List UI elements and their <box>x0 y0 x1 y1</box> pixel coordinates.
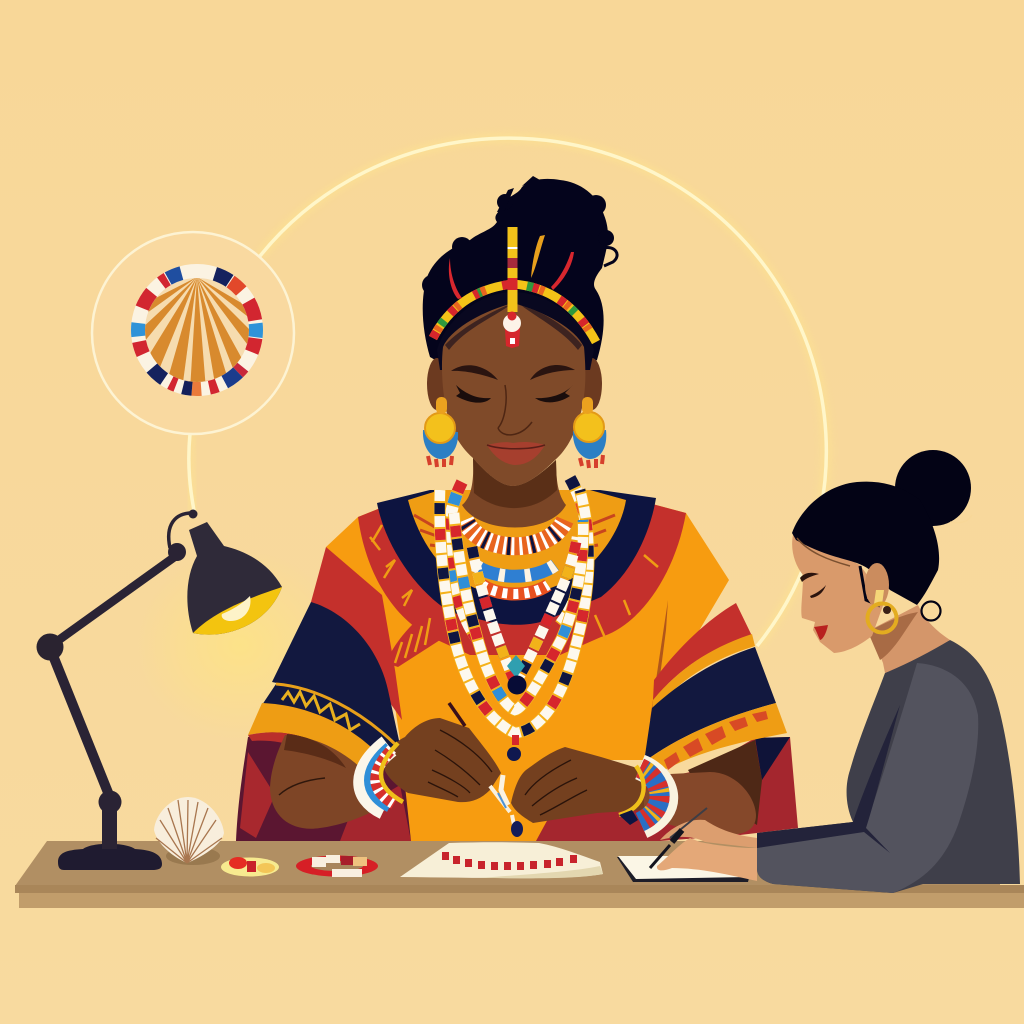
right hand <box>511 747 644 823</box>
lamp glow <box>135 550 345 740</box>
table front <box>19 893 1024 908</box>
neck shadow <box>473 458 557 508</box>
chest beaded collars <box>465 520 565 594</box>
necklace inner <box>472 537 577 683</box>
central pendant <box>508 676 526 694</box>
hair <box>792 482 939 605</box>
right sleeve scallops <box>664 711 768 770</box>
table <box>15 841 1024 908</box>
notebook <box>617 856 749 882</box>
left bracelets <box>365 743 403 808</box>
back robe left <box>236 728 420 841</box>
earring left <box>423 397 458 467</box>
lamp arms <box>54 658 109 795</box>
yoke gold stripes <box>408 490 626 595</box>
table top <box>15 841 1000 886</box>
yoke fringe <box>386 607 440 667</box>
left sleeve navy <box>272 602 400 745</box>
ear right <box>582 358 602 410</box>
sweater shadow <box>757 705 900 853</box>
hair curl <box>603 247 617 266</box>
right bracelets <box>619 766 665 826</box>
face <box>442 303 585 486</box>
left sleeve pattern band <box>262 684 396 760</box>
main figure: woman beading <box>236 176 798 841</box>
sweater <box>757 640 1020 893</box>
necklace side left <box>448 482 478 640</box>
lower pendant <box>507 735 521 761</box>
bun <box>895 450 971 526</box>
medallion shell <box>145 278 249 382</box>
lamp post <box>102 805 117 849</box>
second woman writing <box>650 450 1020 893</box>
lamp bulb <box>222 596 251 621</box>
necklace middle <box>454 513 583 710</box>
hair loop <box>922 602 940 620</box>
red bead line <box>442 852 577 870</box>
long necklaces <box>440 478 589 733</box>
neck front <box>462 458 566 528</box>
lips <box>814 625 828 640</box>
neck <box>870 605 950 673</box>
left sleeve gold edge <box>248 703 384 778</box>
lamp loop <box>169 513 192 548</box>
table bead piece yellow <box>221 857 279 876</box>
needle <box>449 703 465 726</box>
lamp shade <box>187 522 282 635</box>
halo ring <box>189 138 826 646</box>
hair band shadow <box>437 292 594 370</box>
lips <box>487 442 545 465</box>
yoke glyphs <box>370 525 658 640</box>
writing hand <box>657 838 757 881</box>
hair parting strands <box>445 303 582 350</box>
brow and eye <box>800 573 826 598</box>
hair <box>422 176 614 380</box>
right sleeve navy <box>644 647 776 762</box>
illustration: artisans at beadwork table <box>15 136 1024 908</box>
robe yellow body <box>326 497 729 841</box>
beads in hands <box>490 775 523 837</box>
left hand <box>383 718 501 802</box>
eyes <box>456 385 573 403</box>
earring right <box>573 397 606 468</box>
back robe right <box>534 737 798 841</box>
yoke navy crescent <box>377 490 656 625</box>
robe yoke red band <box>358 497 686 655</box>
teal diamond above pendant <box>507 655 525 678</box>
right sleeve patterned band <box>644 703 787 775</box>
ear left <box>427 358 447 410</box>
desk lamp <box>36 510 282 870</box>
left sleeve red <box>311 547 402 720</box>
face <box>792 535 885 653</box>
table bead ring red <box>296 855 378 877</box>
table edge <box>15 885 1024 893</box>
lamp opening <box>193 587 282 635</box>
right sleeve stripes <box>653 603 752 700</box>
pen <box>650 845 670 868</box>
forehead ornament <box>503 227 521 348</box>
headband <box>433 284 596 342</box>
nose <box>498 385 532 435</box>
hair feathers <box>449 258 462 299</box>
medallion: scallop shell in beaded ring <box>92 232 294 434</box>
left arm <box>270 735 395 829</box>
earring <box>868 590 896 632</box>
paper with red beads <box>400 842 603 878</box>
necklace outer <box>440 490 589 733</box>
eyebrows <box>451 365 575 380</box>
ear <box>865 563 889 607</box>
scallop shell on table <box>154 797 224 865</box>
sweater arm <box>757 663 978 893</box>
lamp base <box>58 844 162 870</box>
medallion bead ring <box>138 271 256 389</box>
right arm <box>688 740 762 825</box>
necklace side right <box>560 478 587 625</box>
